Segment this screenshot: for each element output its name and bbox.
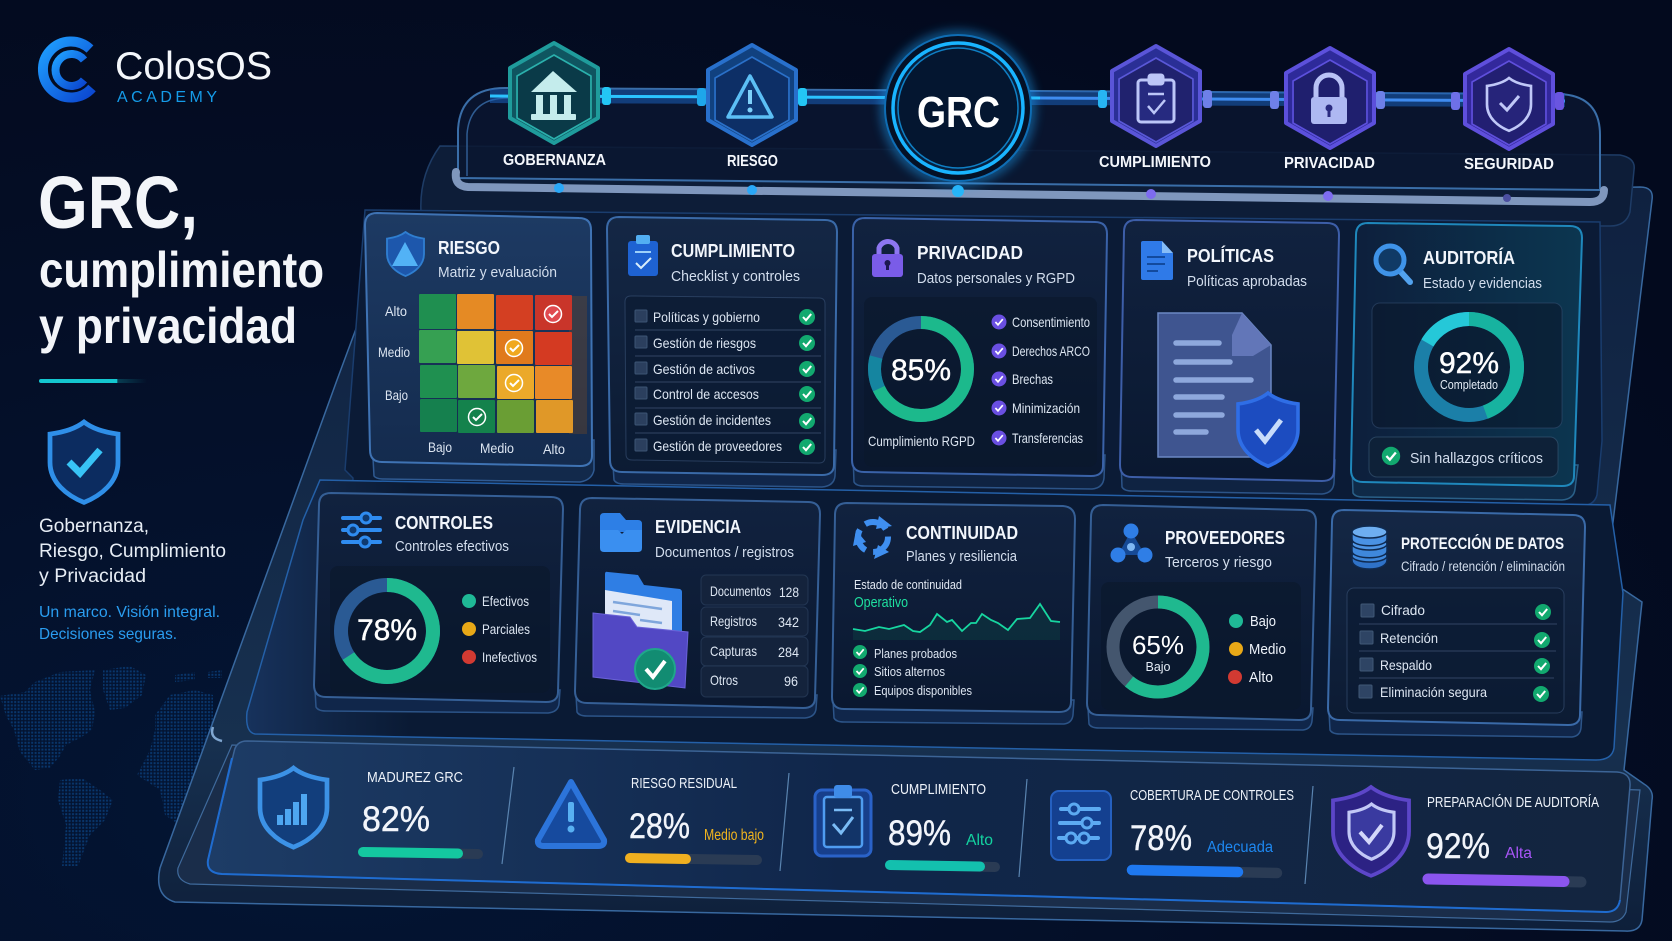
stepped platform	[159, 146, 1652, 931]
node: riesgo	[708, 45, 796, 170]
node: cumplimiento	[1099, 46, 1211, 171]
subheading: Cifrado / retención / eliminación	[1401, 559, 1565, 574]
KPI: cumplimiento	[815, 782, 995, 867]
title	[38, 161, 324, 354]
icon: bank	[531, 71, 577, 120]
status value: Operativo	[854, 595, 908, 611]
logo	[43, 42, 272, 106]
label: RIESGO	[727, 153, 778, 170]
panel: riesgo	[365, 213, 594, 482]
inner panel	[864, 297, 1097, 467]
lower glass layer	[178, 745, 1640, 922]
world map dots	[0, 666, 222, 866]
matrix axis labels: Alto	[543, 441, 565, 457]
qualifier: Alto	[966, 832, 993, 849]
icon: clipboard	[1138, 75, 1174, 122]
checklist: Respaldo	[1380, 657, 1432, 673]
GRC label: GRC	[917, 88, 1000, 137]
KPI: madurez GRC	[260, 768, 478, 854]
matrix axis labels: Bajo	[428, 439, 452, 455]
legend: Inefectivos	[482, 649, 537, 665]
rail lip	[456, 172, 1604, 202]
panel: politicas	[1120, 220, 1339, 494]
node: seguridad	[1464, 49, 1554, 173]
subheading: Checklist y controles	[671, 268, 800, 285]
icon: clipboard	[815, 785, 871, 856]
panel: evidencia	[575, 498, 820, 718]
stats table	[701, 575, 808, 697]
matrix markers	[468, 306, 562, 426]
stats table: 128	[779, 584, 799, 600]
progress bar	[1132, 870, 1277, 873]
label: PRIVACIDAD	[1284, 155, 1375, 172]
node: privacidad	[1284, 48, 1375, 172]
subheading: Terceros y riesgo	[1165, 554, 1272, 571]
checklist: Retención	[1380, 630, 1438, 646]
legend: Alto	[1249, 670, 1273, 686]
donut chart 78%: 78%	[357, 614, 417, 647]
qualifier: Adecuada	[1207, 839, 1273, 856]
icon: warning	[728, 76, 772, 117]
icon: policy shield	[1238, 393, 1298, 466]
left tagline	[39, 604, 220, 643]
icon: warning	[538, 782, 604, 846]
heading: PROVEEDORES	[1165, 527, 1285, 548]
donut chart 85%: 85%	[891, 354, 951, 387]
donut chart 65%	[1113, 602, 1203, 692]
KPI: preparacion de auditoria	[1333, 787, 1599, 882]
status pill: Sin hallazgos críticos	[1410, 450, 1543, 467]
subheading: Matriz y evaluación	[438, 264, 557, 281]
privacy checks: Minimización	[1012, 400, 1080, 416]
label: GOBERNANZA	[503, 152, 606, 169]
heading: AUDITORÍA	[1423, 247, 1515, 268]
checklist: Gestión de activos	[653, 361, 755, 377]
status pill	[1369, 437, 1558, 477]
icon: database	[1352, 526, 1387, 569]
legend: Bajo	[1250, 614, 1276, 630]
title: cumplimiento	[39, 242, 324, 298]
progress bar	[363, 852, 478, 854]
continuity checks: Planes probados	[874, 646, 957, 661]
value: 78%	[1130, 819, 1192, 858]
heading: PROTECCIÓN DE DATOS	[1401, 534, 1564, 553]
panel: cumplimiento	[607, 217, 837, 487]
continuity checks: Equipos disponibles	[874, 683, 972, 698]
inner panel	[1372, 303, 1562, 428]
icon: lock	[872, 242, 903, 277]
donut chart 92%	[1421, 319, 1517, 415]
icon: padlock	[1311, 75, 1347, 124]
qualifier: Alta	[1505, 845, 1532, 862]
donut chart 78%	[341, 585, 433, 677]
KPI: riesgo residual	[538, 776, 764, 860]
checklist: Gestión de proveedores	[653, 438, 782, 454]
checklist: Políticas y gobierno	[653, 309, 760, 325]
privacy checks: Consentimiento	[1012, 314, 1090, 330]
icon: sliders	[343, 513, 380, 547]
privacy checks: Brechas	[1012, 371, 1053, 387]
row 2 tray	[247, 480, 1623, 760]
icon: left shield	[50, 422, 118, 502]
node: gobernanza	[503, 43, 606, 169]
checklist	[1347, 588, 1564, 713]
heading: RIESGO	[438, 237, 500, 258]
rail connectors	[602, 87, 1564, 110]
heading: PRIVACIDAD	[917, 242, 1023, 263]
matrix axis labels: Bajo	[385, 387, 408, 403]
privacy checks: Derechos ARCO	[1012, 343, 1090, 359]
stats table: Documentos	[710, 583, 771, 599]
brand name: ColosOS	[115, 45, 272, 88]
heading: EVIDENCIA	[655, 516, 741, 537]
subheading: Estado y evidencias	[1423, 275, 1542, 292]
stats table: Registros	[710, 613, 757, 629]
progress bar	[630, 858, 757, 860]
subheading: Datos personales y RGPD	[917, 270, 1075, 287]
left description: Gobernanza,	[39, 516, 149, 537]
donut caption: Cumplimiento RGPD	[868, 433, 975, 449]
qualifier: Medio bajo	[704, 827, 764, 844]
inner panel	[330, 566, 550, 693]
icon: check badge	[635, 649, 675, 689]
donut chart 92%: Completado	[1440, 378, 1498, 392]
icon: shield bars	[260, 768, 327, 847]
label: CUMPLIMIENTO	[1099, 154, 1211, 171]
title: y privacidad	[39, 298, 297, 354]
stats table: Capturas	[710, 643, 757, 659]
KPI: cobertura de controles	[1051, 788, 1294, 873]
row 1 tray	[345, 210, 1602, 506]
rail tray	[458, 88, 1600, 190]
accent line	[39, 379, 147, 383]
icon: sliders	[1051, 791, 1111, 860]
value: 82%	[362, 800, 430, 839]
left tagline: Decisiones seguras.	[39, 626, 177, 643]
inner panel	[1101, 582, 1301, 710]
heading: CUMPLIMIENTO	[671, 240, 795, 261]
checklist: Cifrado	[1381, 602, 1425, 618]
value: 92%	[1426, 827, 1490, 866]
subheading: Documentos / registros	[655, 544, 794, 561]
continuity checks: Sitios alternos	[874, 664, 945, 679]
label: PREPARACIÓN DE AUDITORÍA	[1427, 794, 1599, 811]
heading: CONTROLES	[395, 512, 493, 533]
heading: POLÍTICAS	[1187, 245, 1274, 266]
matrix axis labels: Alto	[385, 303, 407, 319]
legend	[462, 593, 537, 665]
legend: Efectivos	[482, 593, 529, 609]
left description: Riesgo, Cumplimiento	[39, 541, 226, 562]
legend	[1228, 614, 1286, 686]
privacy checks	[992, 314, 1090, 446]
matrix axis labels: Medio	[480, 440, 514, 456]
checklist: Gestión de riesgos	[653, 335, 756, 351]
rail pipe	[490, 96, 1565, 101]
folder illustration	[593, 572, 688, 689]
stats table: 96	[784, 673, 798, 689]
panel: controles	[314, 493, 563, 713]
checklist: Control de accesos	[653, 386, 759, 402]
rail nodes	[554, 183, 1511, 202]
left description: y Privacidad	[39, 566, 146, 587]
KPI bar	[208, 741, 1630, 912]
checklist: Eliminación segura	[1380, 684, 1487, 700]
icon: folder	[600, 513, 642, 552]
risk matrix	[419, 294, 587, 434]
node: GRC center	[885, 35, 1031, 181]
subheading: Políticas aprobadas	[1187, 273, 1307, 290]
progress bar	[1428, 879, 1581, 882]
donut chart 65%: 65%	[1132, 630, 1184, 660]
panel: privacidad	[852, 218, 1107, 489]
value: 28%	[629, 807, 690, 846]
title: GRC,	[38, 161, 198, 244]
donut chart 65%: Bajo	[1145, 660, 1171, 674]
status label: Estado de continuidad	[854, 577, 962, 592]
icon: magnifier	[1376, 246, 1410, 282]
heading: CONTINUIDAD	[906, 522, 1018, 543]
value: 89%	[888, 814, 951, 853]
progress bar	[890, 865, 995, 867]
panel: auditoria	[1351, 223, 1582, 500]
icon: cycle	[853, 516, 892, 559]
stats table: 284	[778, 644, 799, 660]
donut chart 85%	[874, 322, 968, 416]
matrix axis labels: Medio	[378, 344, 410, 360]
top rail	[456, 87, 1604, 202]
subheading: Controles efectivos	[395, 538, 509, 555]
icon: clipboard	[628, 235, 658, 276]
label: CUMPLIMIENTO	[891, 782, 986, 798]
label: MADUREZ GRC	[367, 770, 463, 786]
base	[159, 187, 1652, 931]
privacy checks: Transferencias	[1012, 430, 1083, 446]
matrix axis labels	[378, 303, 565, 457]
icon: riesgo shield	[387, 232, 424, 276]
top tier	[421, 146, 1634, 226]
left tagline: Un marco. Visión integral.	[39, 604, 220, 621]
icon: purple shield	[1333, 787, 1409, 876]
panel: continuidad	[832, 503, 1075, 724]
donut chart 92%: 92%	[1439, 347, 1499, 380]
legend: Parciales	[482, 621, 530, 637]
legend: Medio	[1249, 642, 1286, 658]
label: COBERTURA DE CONTROLES	[1130, 788, 1294, 804]
label: RIESGO RESIDUAL	[631, 776, 737, 792]
checklist: Gestión de incidentes	[653, 412, 771, 428]
panel: proteccion de datos	[1328, 510, 1585, 737]
icon: network	[1110, 524, 1152, 562]
panel: proveedores	[1087, 505, 1316, 730]
document illustration	[1158, 313, 1271, 457]
brand subtitle: ACADEMY	[117, 89, 217, 106]
icon: logo mark	[43, 42, 92, 98]
checklist	[625, 296, 825, 463]
left description	[39, 516, 226, 587]
subheading: Planes y resiliencia	[906, 548, 1018, 565]
label: SEGURIDAD	[1464, 156, 1554, 173]
stats table: Otros	[710, 672, 738, 688]
left lip highlight	[212, 727, 222, 741]
stats table: 342	[778, 614, 799, 630]
line chart	[853, 604, 1060, 640]
icon: shield	[1487, 78, 1531, 131]
continuity checks	[853, 645, 972, 698]
icon: doc	[1141, 241, 1173, 280]
